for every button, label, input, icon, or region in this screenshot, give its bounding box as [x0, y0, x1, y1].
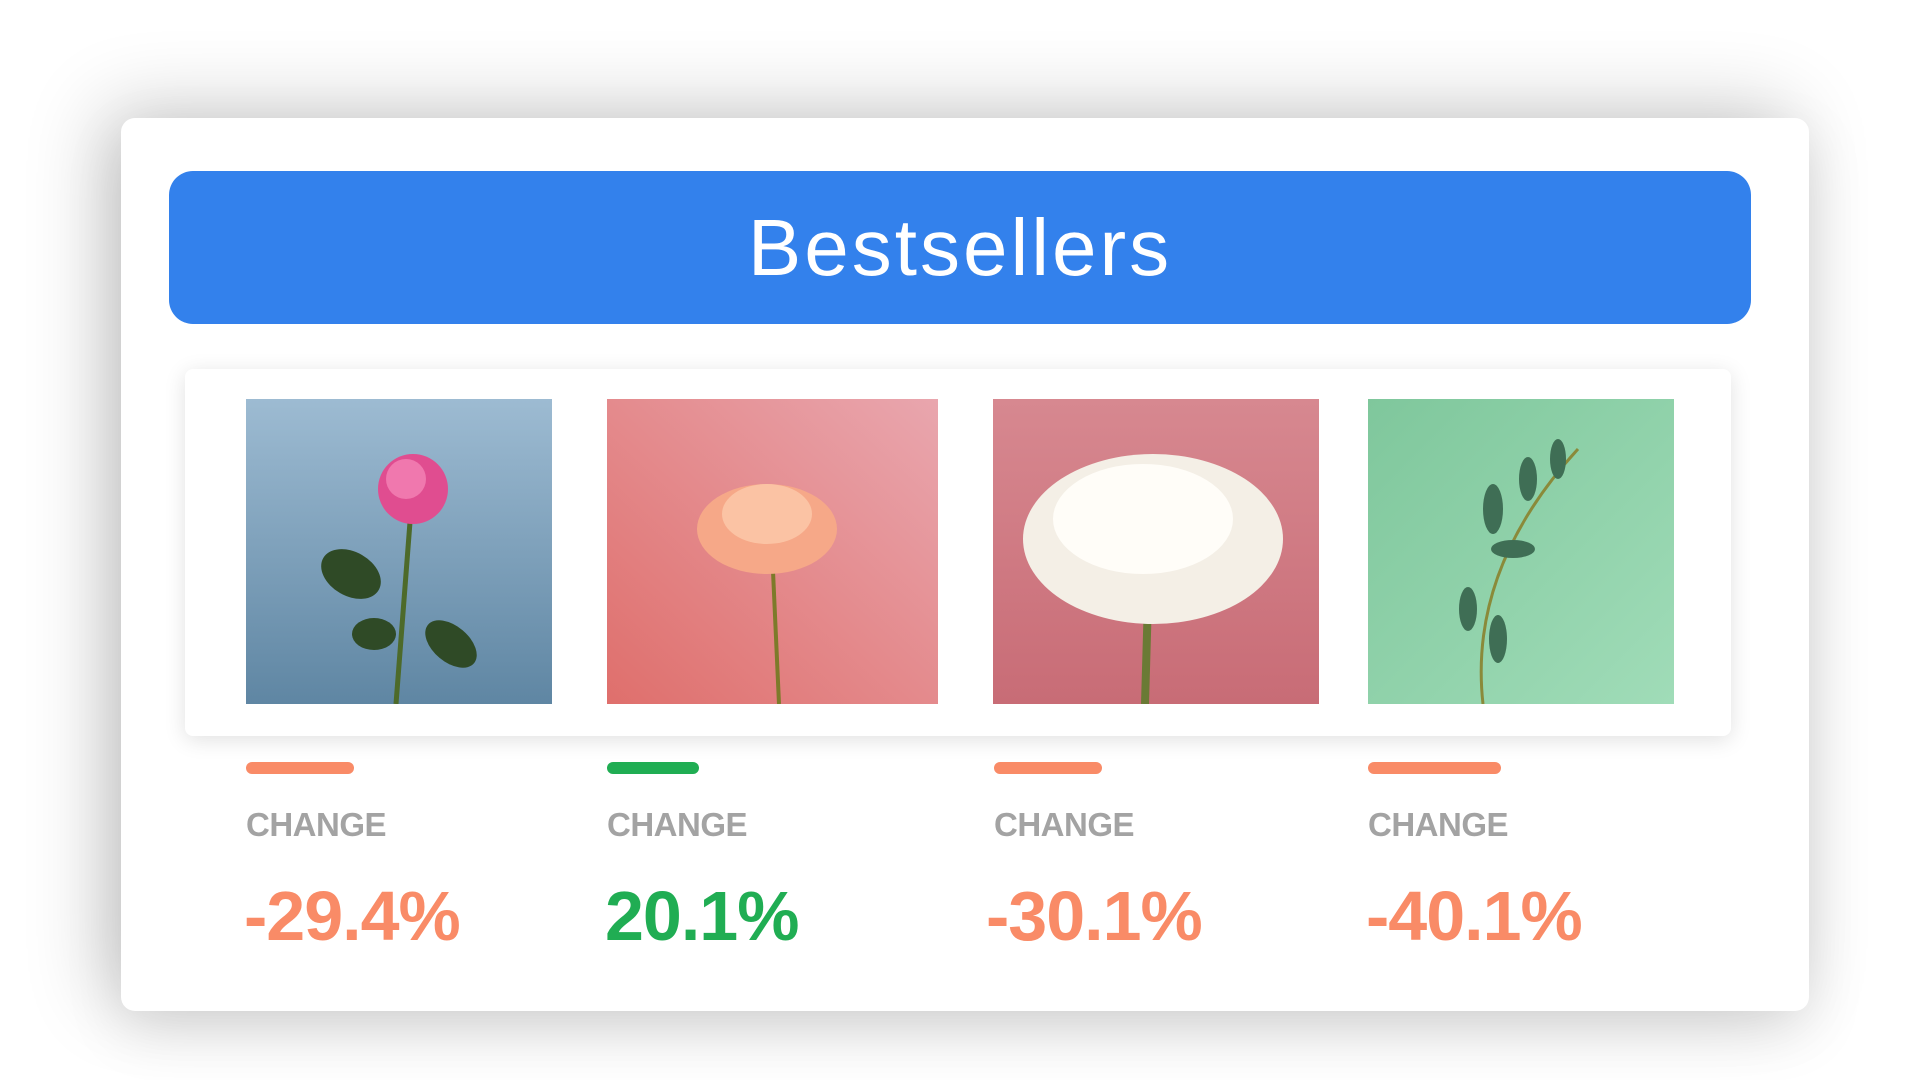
title	[169, 171, 1751, 324]
value 4: -40.1%	[1366, 877, 1582, 955]
label 1: CHANGE	[246, 806, 386, 843]
image: rose	[246, 399, 552, 704]
value 3: -30.1%	[986, 877, 1202, 955]
value 1: -29.4%	[244, 877, 460, 955]
label 3: CHANGE	[994, 806, 1134, 843]
value 2: 20.1%	[605, 877, 798, 955]
image: eucalyptus	[1368, 399, 1674, 704]
label 2: CHANGE	[607, 806, 747, 843]
title: Bestsellers	[748, 203, 1172, 292]
indicator bar 2	[607, 762, 699, 774]
panel: images	[185, 369, 1731, 736]
image: hydrangea	[993, 399, 1319, 704]
indicator bar 3	[994, 762, 1102, 774]
indicator bar 1	[246, 762, 354, 774]
image: peony	[607, 399, 938, 704]
label 4: CHANGE	[1368, 806, 1508, 843]
indicator bar 4	[1368, 762, 1501, 774]
card	[121, 118, 1809, 1011]
